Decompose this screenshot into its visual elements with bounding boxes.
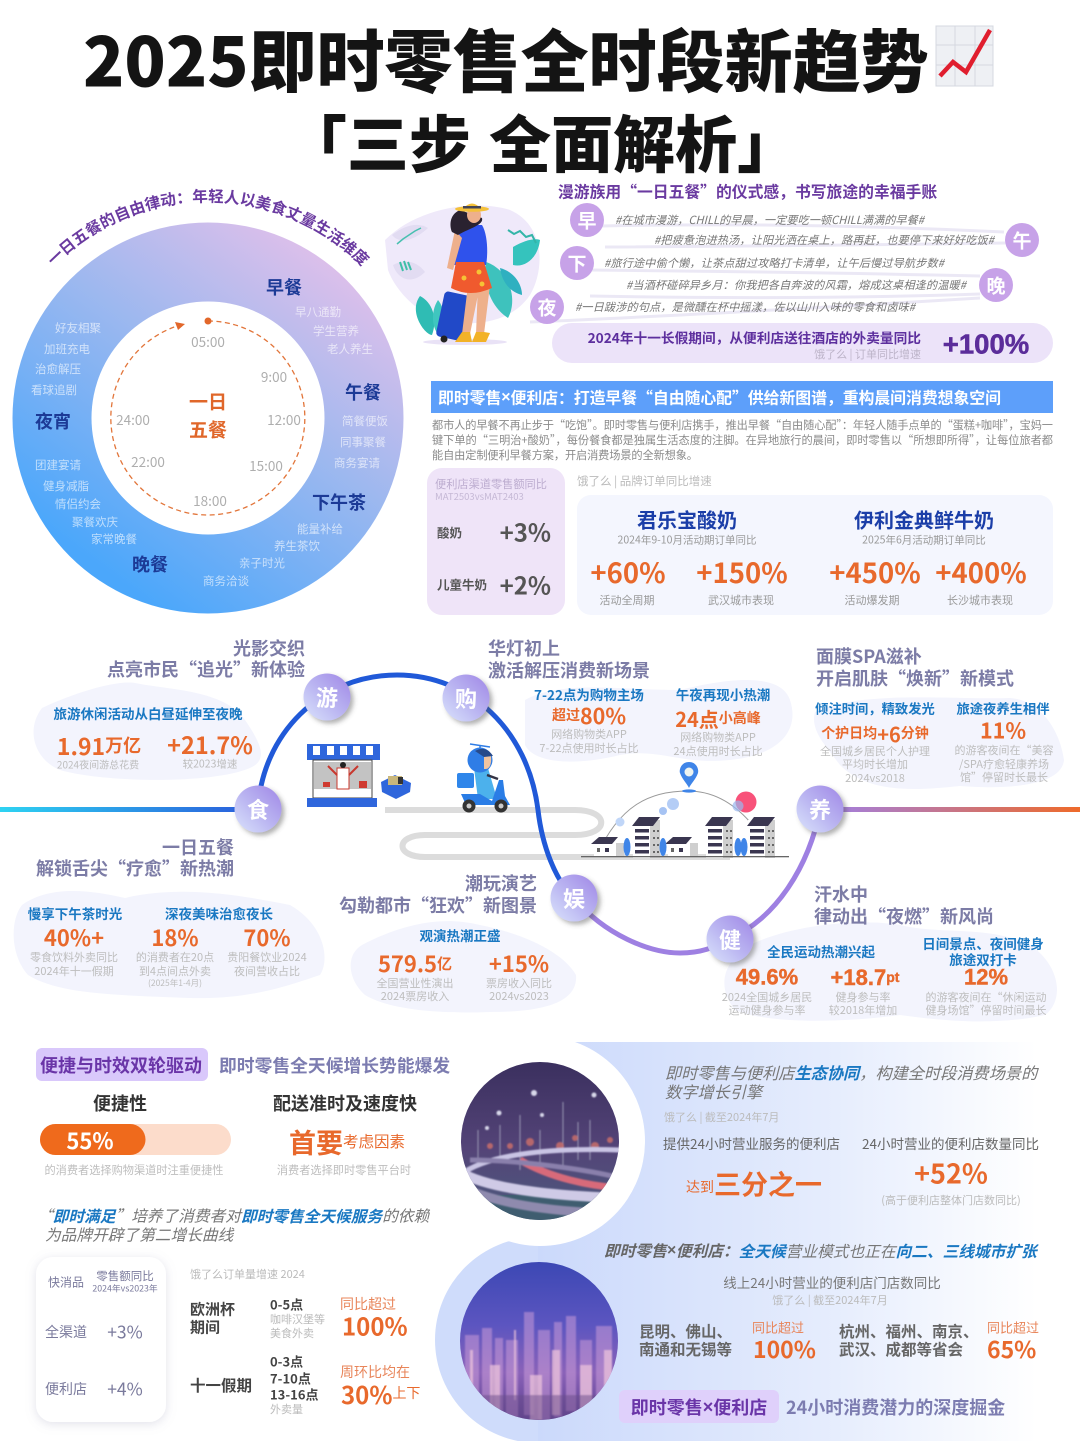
stat: 7-22点: 7-22点使用时长占比	[539, 740, 639, 756]
stat: 11%: /SPA疗愈轻康养场	[959, 756, 1049, 772]
lunch: 同事聚餐	[340, 434, 386, 450]
stats: +18.7pt	[831, 964, 900, 990]
node: 养	[796, 786, 844, 832]
node: 健	[706, 916, 754, 962]
panel: 24h store stats: 达到	[686, 1177, 714, 1197]
hashtag lines: #当酒杯碰碎异乡月：你我把各自奔波的风霜，熔成这桌相逢的温暖#	[626, 277, 968, 293]
source label: 饿了么 | 品牌订单同比增速	[577, 473, 712, 489]
hashtag lines: #旅行途中偷个懒，让茶点甜过攻略打卡清单，让午后慢过导航步数#	[604, 255, 946, 271]
panel: 养 wellness	[814, 643, 1064, 789]
row: Euro Cup: 美食外卖	[270, 1325, 314, 1341]
illustration: delivery rider	[457, 744, 510, 812]
clock times: 15:00	[249, 455, 283, 475]
heading: 华灯初上	[488, 635, 560, 661]
row: Euro Cup: 期间	[190, 1316, 220, 1338]
text block: breakfast paragraph	[432, 417, 1053, 463]
stat: late night: (2025年1-4月)	[148, 977, 202, 989]
stats: 较2018年增加	[829, 1002, 897, 1018]
panel: convenience channel sales: MAT2503vsMAT2403	[435, 489, 524, 503]
lunch: 简餐便饭	[342, 413, 388, 429]
panel: brand order growth: +60%	[590, 551, 666, 591]
late night: 治愈解压	[35, 361, 81, 377]
stats: 1.91万亿	[57, 728, 141, 762]
panel: 24h store stats: (高于便利店整体门店数同比)	[881, 1192, 1021, 1208]
row: National Day: 外卖量	[270, 1401, 303, 1417]
panel: convenience bar	[40, 1090, 231, 1178]
stat: 11%	[954, 698, 1054, 785]
breakfast	[266, 274, 373, 357]
panel: city store growth: 饿了么 | 截至2024年7月	[772, 1292, 888, 1308]
stats: 2024vs2023	[489, 988, 549, 1004]
panel: brand order growth: 2025年6月活动期订单同比	[862, 532, 986, 548]
row: National Day	[190, 1352, 420, 1417]
stat: 100%: 同比超过	[752, 1318, 804, 1336]
stat: 12%: 的游客夜间在“休闲运动	[926, 989, 1046, 1005]
banner heading: breakfast: 即时零售×便利店：打造早餐“自由随心配”供给新图谱，重构晨间消费想象空间	[438, 386, 1001, 408]
node: 养: 养	[809, 793, 831, 825]
stat: afternoon tea	[28, 903, 123, 979]
stats: 运动健身参与率	[728, 1002, 806, 1018]
panel: brand order growth	[577, 495, 1053, 615]
panel: convenience bar: 的消费者选择购物渠道时注重便捷性	[44, 1162, 224, 1178]
heading: 面膜SPA滋补	[816, 643, 922, 669]
panel: delivery speed	[273, 1090, 417, 1178]
panel: 24h store stats: 饿了么 | 截至2024年7月	[664, 1109, 779, 1125]
panel: convenience bar: 便捷性	[93, 1090, 147, 1116]
card: FMCG sales: 零售额同比	[96, 1268, 154, 1284]
row: Euro Cup: 欧洲杯	[190, 1298, 235, 1320]
heading: 光影交织	[233, 635, 305, 661]
heading: 解锁舌尖“疗愈”新热潮	[36, 855, 234, 881]
dinner: 聚餐欢庆	[72, 514, 118, 530]
illustration: city with location pin	[581, 762, 789, 858]
title	[83, 8, 993, 185]
afternoon tea: 养生茶饮	[274, 538, 320, 554]
stats: +21.7%	[167, 727, 253, 761]
stats	[376, 925, 552, 1004]
panel: 娱 entertainment	[339, 870, 576, 1012]
panel: 24h store stats: 提供24小时营业服务的便利店	[663, 1133, 840, 1153]
stat: 100%: 南通和无锡等	[639, 1338, 732, 1360]
stat: late night: 深夜美味治愈夜长	[165, 903, 273, 923]
stat: 65%: 武汉、成都等省会	[839, 1338, 964, 1360]
card: FMCG sales: 快消品	[48, 1274, 84, 1290]
late night	[31, 320, 101, 434]
stat: 12%: 健身场馆”停留时间最长	[926, 1002, 1046, 1018]
clock times: 9:00	[261, 366, 287, 386]
illustration: shop	[307, 744, 411, 807]
早: 早	[577, 206, 597, 234]
afternoon tea: 商务洽谈	[203, 573, 249, 589]
stat: 100%	[639, 1318, 816, 1365]
stat: 65%: 同比超过	[987, 1318, 1039, 1336]
late night: 加班充电	[44, 341, 90, 357]
stat: 24点	[673, 684, 770, 759]
node: 娱	[550, 874, 598, 922]
text block: ecosystem heading: 数字增长引擎	[665, 1079, 765, 1103]
夜: 夜	[537, 294, 557, 320]
center label: 一日	[189, 388, 227, 414]
row: National Day: 十一假期	[190, 1374, 252, 1396]
heading	[107, 635, 305, 682]
card: FMCG sales: 全渠道	[45, 1322, 87, 1342]
heading: 一日五餐	[162, 834, 234, 860]
text block: breakfast paragraph: 键下单的“三明治+酸奶”，每份餐食都是独属生活态度的注脚。在异地旅行的晨间，即时零售以“所想即所得”，让每位旅者都	[432, 432, 1053, 448]
ring title: 一日五餐的自由律动：年轻人以美食丈量生活维度	[49, 188, 370, 266]
stat: 100%: 100%	[753, 1331, 816, 1365]
panel: brand order growth: 长沙城市表现	[947, 592, 1013, 608]
text block: ecosystem heading	[665, 1060, 1039, 1103]
panel: brand order growth: +400%	[935, 551, 1027, 591]
stats: 全国营业性演出	[376, 975, 454, 991]
panel: lower-right background	[435, 1036, 1080, 1441]
center label: 五餐	[189, 416, 227, 442]
late night: 好友相聚	[55, 320, 101, 336]
callout: +100% pill: 2024年十一长假期间，从便利店送往酒店的外卖量同比	[588, 327, 921, 347]
panel: lower-left heading: 即时零售全天候增长势能爆发	[219, 1052, 450, 1078]
stats: 2024夜间游总花费	[57, 756, 139, 772]
stat: 个护: 平均时长增加	[842, 756, 908, 772]
text block: lower-tier city heading: 即时零售×便利店：全天候营业模式也正在向二、三线城市扩张	[604, 1238, 1039, 1262]
heading: 勾勒都市“狂欢”新图景	[339, 892, 537, 918]
afternoon tea: 下午茶	[312, 489, 366, 515]
stats: 2024全国城乡居民	[722, 989, 812, 1005]
center label	[189, 388, 227, 442]
heading: 点亮市民“追光”新体验	[107, 656, 305, 682]
stat: 24点: 网络购物类APP	[680, 729, 756, 745]
panel: brand order growth: 2024年9-10月活动期订单同比	[618, 532, 756, 548]
afternoon tea: 亲子时光	[239, 555, 285, 571]
callout: +100% pill: 饿了么 | 订单同比增速	[814, 346, 921, 362]
heading	[488, 635, 650, 683]
stat: 7-22点: 网络购物类APP	[551, 726, 627, 742]
row: Euro Cup	[190, 1294, 408, 1342]
stat: 7-22点	[534, 684, 644, 756]
stat: 65%: 杭州、福州、南京、	[839, 1320, 979, 1342]
午	[1005, 223, 1039, 257]
late night: 夜宵	[35, 408, 71, 434]
stats	[722, 941, 900, 1018]
heading	[816, 643, 1014, 691]
panel: lower-left heading	[36, 1048, 450, 1081]
dinner: 家常晚餐	[91, 531, 137, 547]
panel: Ele.me order growth	[190, 1266, 420, 1417]
node: 食: 食	[247, 793, 269, 825]
text block: breakfast paragraph: 都市人的早餐不再止步于“吃饱”。即时零售与便利店携手，推出早餐“自由随心配”：年轻人随手点单的“蛋糕+咖啡”，宝妈一	[432, 417, 1053, 433]
stat: 24点: 24点小高峰	[675, 704, 761, 732]
stats: 579.5亿	[378, 947, 452, 979]
stat: 个护: 倾注时间，精致发光	[815, 698, 935, 718]
illustration: traveller woman	[385, 204, 540, 345]
panel: clock ring of five meals	[12, 188, 404, 614]
breakfast: 学生营养	[313, 323, 359, 339]
panel: convenience channel sales: +3%	[500, 514, 551, 548]
panel: 购 shopping	[488, 635, 792, 762]
早	[570, 203, 604, 237]
dinner: 健身减脂	[43, 478, 89, 494]
text block: instant satisfaction: “即时满足”培养了消费者对即时零售全天候服务的依赖	[37, 1204, 430, 1226]
title line 2: 「三步 全面解析」	[285, 95, 799, 185]
stats: +15%	[489, 947, 549, 979]
stat: 11%: 馆”停留时长最长	[960, 769, 1048, 785]
dinner: 情侣约会	[55, 496, 101, 512]
journey line	[0, 675, 1080, 953]
node: 娱: 娱	[563, 882, 585, 914]
row: Euro Cup: 咖啡汉堡等	[270, 1311, 325, 1327]
icon: chart emoji	[936, 26, 993, 86]
heading: 汗水中	[814, 881, 868, 907]
stat: 65%: 65%	[987, 1331, 1036, 1365]
illustration: road	[385, 810, 730, 857]
heading: 律动出“夜燃”新风尚	[814, 903, 994, 929]
panel: delivery speed: 配送准时及速度快	[273, 1090, 417, 1116]
stat: afternoon tea: 40%+	[44, 921, 104, 953]
panel: 游 tourism	[34, 635, 305, 780]
stat: 24点: 午夜再现小热潮	[676, 684, 770, 704]
late night: 看球追剧	[31, 382, 77, 398]
breakfast: 早八通勤	[295, 304, 341, 320]
panel: closing heading: 24小时消费潜力的深度掘金	[786, 1394, 1005, 1420]
stat: afternoon tea: 慢享下午茶时光	[28, 903, 123, 923]
row: Euro Cup: 100%	[342, 1308, 408, 1342]
panel: closing heading: 即时零售×便利店	[631, 1394, 767, 1420]
stats: 观演热潮正盛	[420, 925, 500, 945]
夜	[530, 290, 564, 324]
panel: closing heading	[619, 1390, 1005, 1423]
afternoon tea	[203, 489, 366, 589]
panel: 食 food	[14, 834, 325, 998]
panel: 24h store stats	[663, 1109, 1039, 1208]
panel: city store growth: 线上24小时营业的便利店门店数同比	[723, 1272, 941, 1292]
clock times: 18:00	[193, 490, 227, 510]
午: 午	[1012, 226, 1032, 254]
heading: 潮玩演艺	[465, 870, 537, 896]
hashtag lines	[575, 212, 996, 315]
card: FMCG sales: +4%	[107, 1376, 143, 1402]
breakfast: 老人养生	[327, 341, 373, 357]
node: 游	[304, 674, 350, 720]
stats: 票房收入同比	[486, 975, 552, 991]
stat: afternoon tea: 零食饮料外卖同比	[30, 949, 118, 965]
photo: night highway	[460, 1061, 620, 1222]
panel: convenience channel sales	[427, 468, 565, 615]
panel: brand order growth: +450%	[829, 551, 921, 591]
panel: convenience bar: 55%	[66, 1124, 114, 1156]
lunch: 商务宴请	[334, 455, 380, 471]
text block: breakfast paragraph: 能自由定制便利早餐方案，开启消费场景的全新想象。	[432, 447, 698, 463]
panel: brand order growth: 武汉城市表现	[708, 592, 774, 608]
clock times	[116, 331, 301, 510]
stat: 11%: 11%	[980, 714, 1026, 746]
clock times: 12:00	[267, 409, 301, 429]
panel: Ele.me order growth: 饿了么订单量增速 2024	[190, 1266, 305, 1282]
text block: ecosystem heading: 即时零售与便利店生态协同，构建全时段消费场景的	[665, 1060, 1039, 1084]
card: FMCG sales	[36, 1257, 166, 1422]
row: National Day: 0-3点	[270, 1352, 303, 1370]
node: 食	[234, 786, 282, 832]
node: 健: 健	[719, 923, 741, 955]
panel: 24h store stats: +52%	[914, 1152, 988, 1192]
callout: +100% pill	[552, 323, 1053, 363]
stat: late night: 的消费者在20点	[136, 949, 214, 965]
stat: 65%	[839, 1318, 1039, 1365]
clock times: 05:00	[191, 331, 225, 351]
晚: 晚	[986, 272, 1006, 298]
panel: 健 fitness	[722, 881, 1057, 1021]
title line 1: 2025即时零售全时段新趋势	[83, 8, 929, 106]
stat: 11%: 的游客夜间在“美容	[954, 742, 1054, 758]
lunch	[334, 379, 388, 471]
stat: late night: 到4点间点外卖	[139, 963, 211, 979]
stat: 12%: 12%	[964, 964, 1008, 990]
stat: 12%	[922, 933, 1046, 1018]
dinner: 团建宴请	[35, 457, 81, 473]
callout: +100% pill: +100%	[943, 328, 1029, 360]
clock times: 22:00	[131, 451, 165, 471]
stat: afternoon tea: 2024年十一假期	[34, 963, 114, 979]
stat: 个护: 全国城乡居民个人护理	[820, 743, 930, 759]
panel: convenience channel sales: 儿童牛奶	[437, 574, 487, 594]
dashed clock arrow	[111, 318, 305, 515]
heading: 激活解压消费新场景	[488, 657, 650, 683]
heading	[36, 834, 234, 881]
panel: convenience channel sales: +2%	[500, 566, 551, 602]
stat: late night: 贵阳餐饮业2024	[227, 949, 307, 965]
panel: 24h store stats: 三分之一	[714, 1164, 822, 1202]
stat: 个护: 2024vs2018	[845, 770, 905, 786]
stat: late night: 18%	[151, 921, 199, 953]
photo: purple city skyline	[460, 1262, 620, 1425]
下: 下	[567, 250, 587, 276]
stats: 2024票房收入	[381, 988, 449, 1004]
stat: 个护	[815, 698, 935, 786]
stat: 24点: 24点使用时长占比	[673, 743, 763, 759]
node: 购: 购	[455, 682, 477, 714]
card: FMCG sales: 便利店	[45, 1379, 87, 1399]
text block: instant satisfaction: 为品牌开辟了第二增长曲线	[45, 1222, 235, 1246]
clock times: 24:00	[116, 409, 150, 429]
stats: 健身参与率	[836, 989, 890, 1005]
stat: late night	[136, 903, 307, 989]
hashtag lines: #一日跋涉的句点，是微醺在杯中摇漾，佐以山川入味的零食和卤味#	[575, 299, 917, 315]
hashtag lines: #在城市漫游，CHILL的早晨，一定要吃一顿CHILL满满的早餐#	[615, 212, 926, 228]
晚	[979, 268, 1013, 302]
stat: late night: 70%	[243, 921, 291, 953]
panel: five meals hashtags	[530, 203, 1039, 324]
row: National Day: 周环比均在	[340, 1362, 410, 1382]
node: 购	[442, 674, 490, 722]
stat: 7-22点: 7-22点为购物主场	[534, 684, 644, 704]
text block: instant satisfaction	[37, 1204, 430, 1246]
row: National Day: 7-10点	[270, 1368, 311, 1388]
card: FMCG sales: 2024年vs2023年	[92, 1282, 158, 1294]
panel: brand order growth: +150%	[696, 551, 788, 591]
dinner: 晚餐	[132, 551, 168, 577]
banner heading: breakfast	[431, 381, 1053, 413]
panel: brand order growth: 活动爆发期	[844, 592, 900, 608]
stat: 12%: 旅途双打卡	[949, 949, 1017, 969]
panel: lower-left heading: 便捷与时效双轮驱动	[40, 1052, 202, 1078]
afternoon tea: 能量补给	[297, 521, 343, 537]
hashtag lines: #把疲惫泡进热汤，让阳光洒在桌上，路再赶，也要停下来好好吃饭#	[654, 232, 996, 248]
下	[560, 246, 594, 280]
breakfast: 早餐	[266, 274, 302, 300]
stat: late night: 夜间营收占比	[234, 963, 300, 979]
heading: travellers: 漫游族用“一日五餐”的仪式感，书写旅途的幸福手账	[558, 180, 937, 202]
panel: convenience channel sales: 便利店渠道零售额同比	[435, 476, 547, 492]
panel: brand order growth: 活动全周期	[600, 592, 654, 608]
stat: 11%: 旅途夜养生相伴	[956, 698, 1050, 718]
row: Euro Cup: 同比超过	[340, 1294, 396, 1314]
stats: 49.6%	[736, 964, 798, 990]
panel: city store growth	[639, 1272, 1039, 1365]
stat: 100%: 昆明、佛山、	[639, 1320, 732, 1342]
stat: 7-22点: 超过80%	[552, 700, 626, 730]
heading	[814, 881, 994, 929]
stats: 较2023增速	[183, 756, 238, 772]
stats	[54, 703, 253, 772]
dinner	[35, 457, 168, 577]
lunch: 午餐	[345, 379, 381, 405]
row: Euro Cup: 0-5点	[270, 1294, 303, 1314]
panel: 24h store stats: 24小时营业的便利店数量同比	[862, 1133, 1039, 1153]
node: 游: 游	[316, 681, 338, 713]
panel: brand order growth: 伊利金典鲜牛奶	[854, 504, 994, 534]
stats: 旅游休闲活动从白昼延伸至夜晚	[54, 703, 243, 723]
card: FMCG sales: +3%	[107, 1320, 143, 1344]
panel: convenience channel sales: 酸奶	[437, 522, 462, 542]
heading	[339, 870, 537, 918]
stat: 个护: 个护日均+6分钟	[821, 718, 929, 748]
stats: 全民运动热潮兴起	[767, 941, 875, 961]
panel: delivery speed: 首要考虑因素	[289, 1122, 405, 1160]
heading: 开启肌肤“焕新”新模式	[816, 665, 1014, 691]
panel: delivery speed: 消费者选择即时零售平台时	[277, 1162, 411, 1178]
row: National Day: 30%上下	[341, 1376, 420, 1410]
stat: 12%: 日间景点、夜间健身	[922, 933, 1044, 953]
panel: brand order growth: 君乐宝酸奶	[637, 504, 737, 534]
row: National Day: 13-16点	[270, 1384, 318, 1404]
